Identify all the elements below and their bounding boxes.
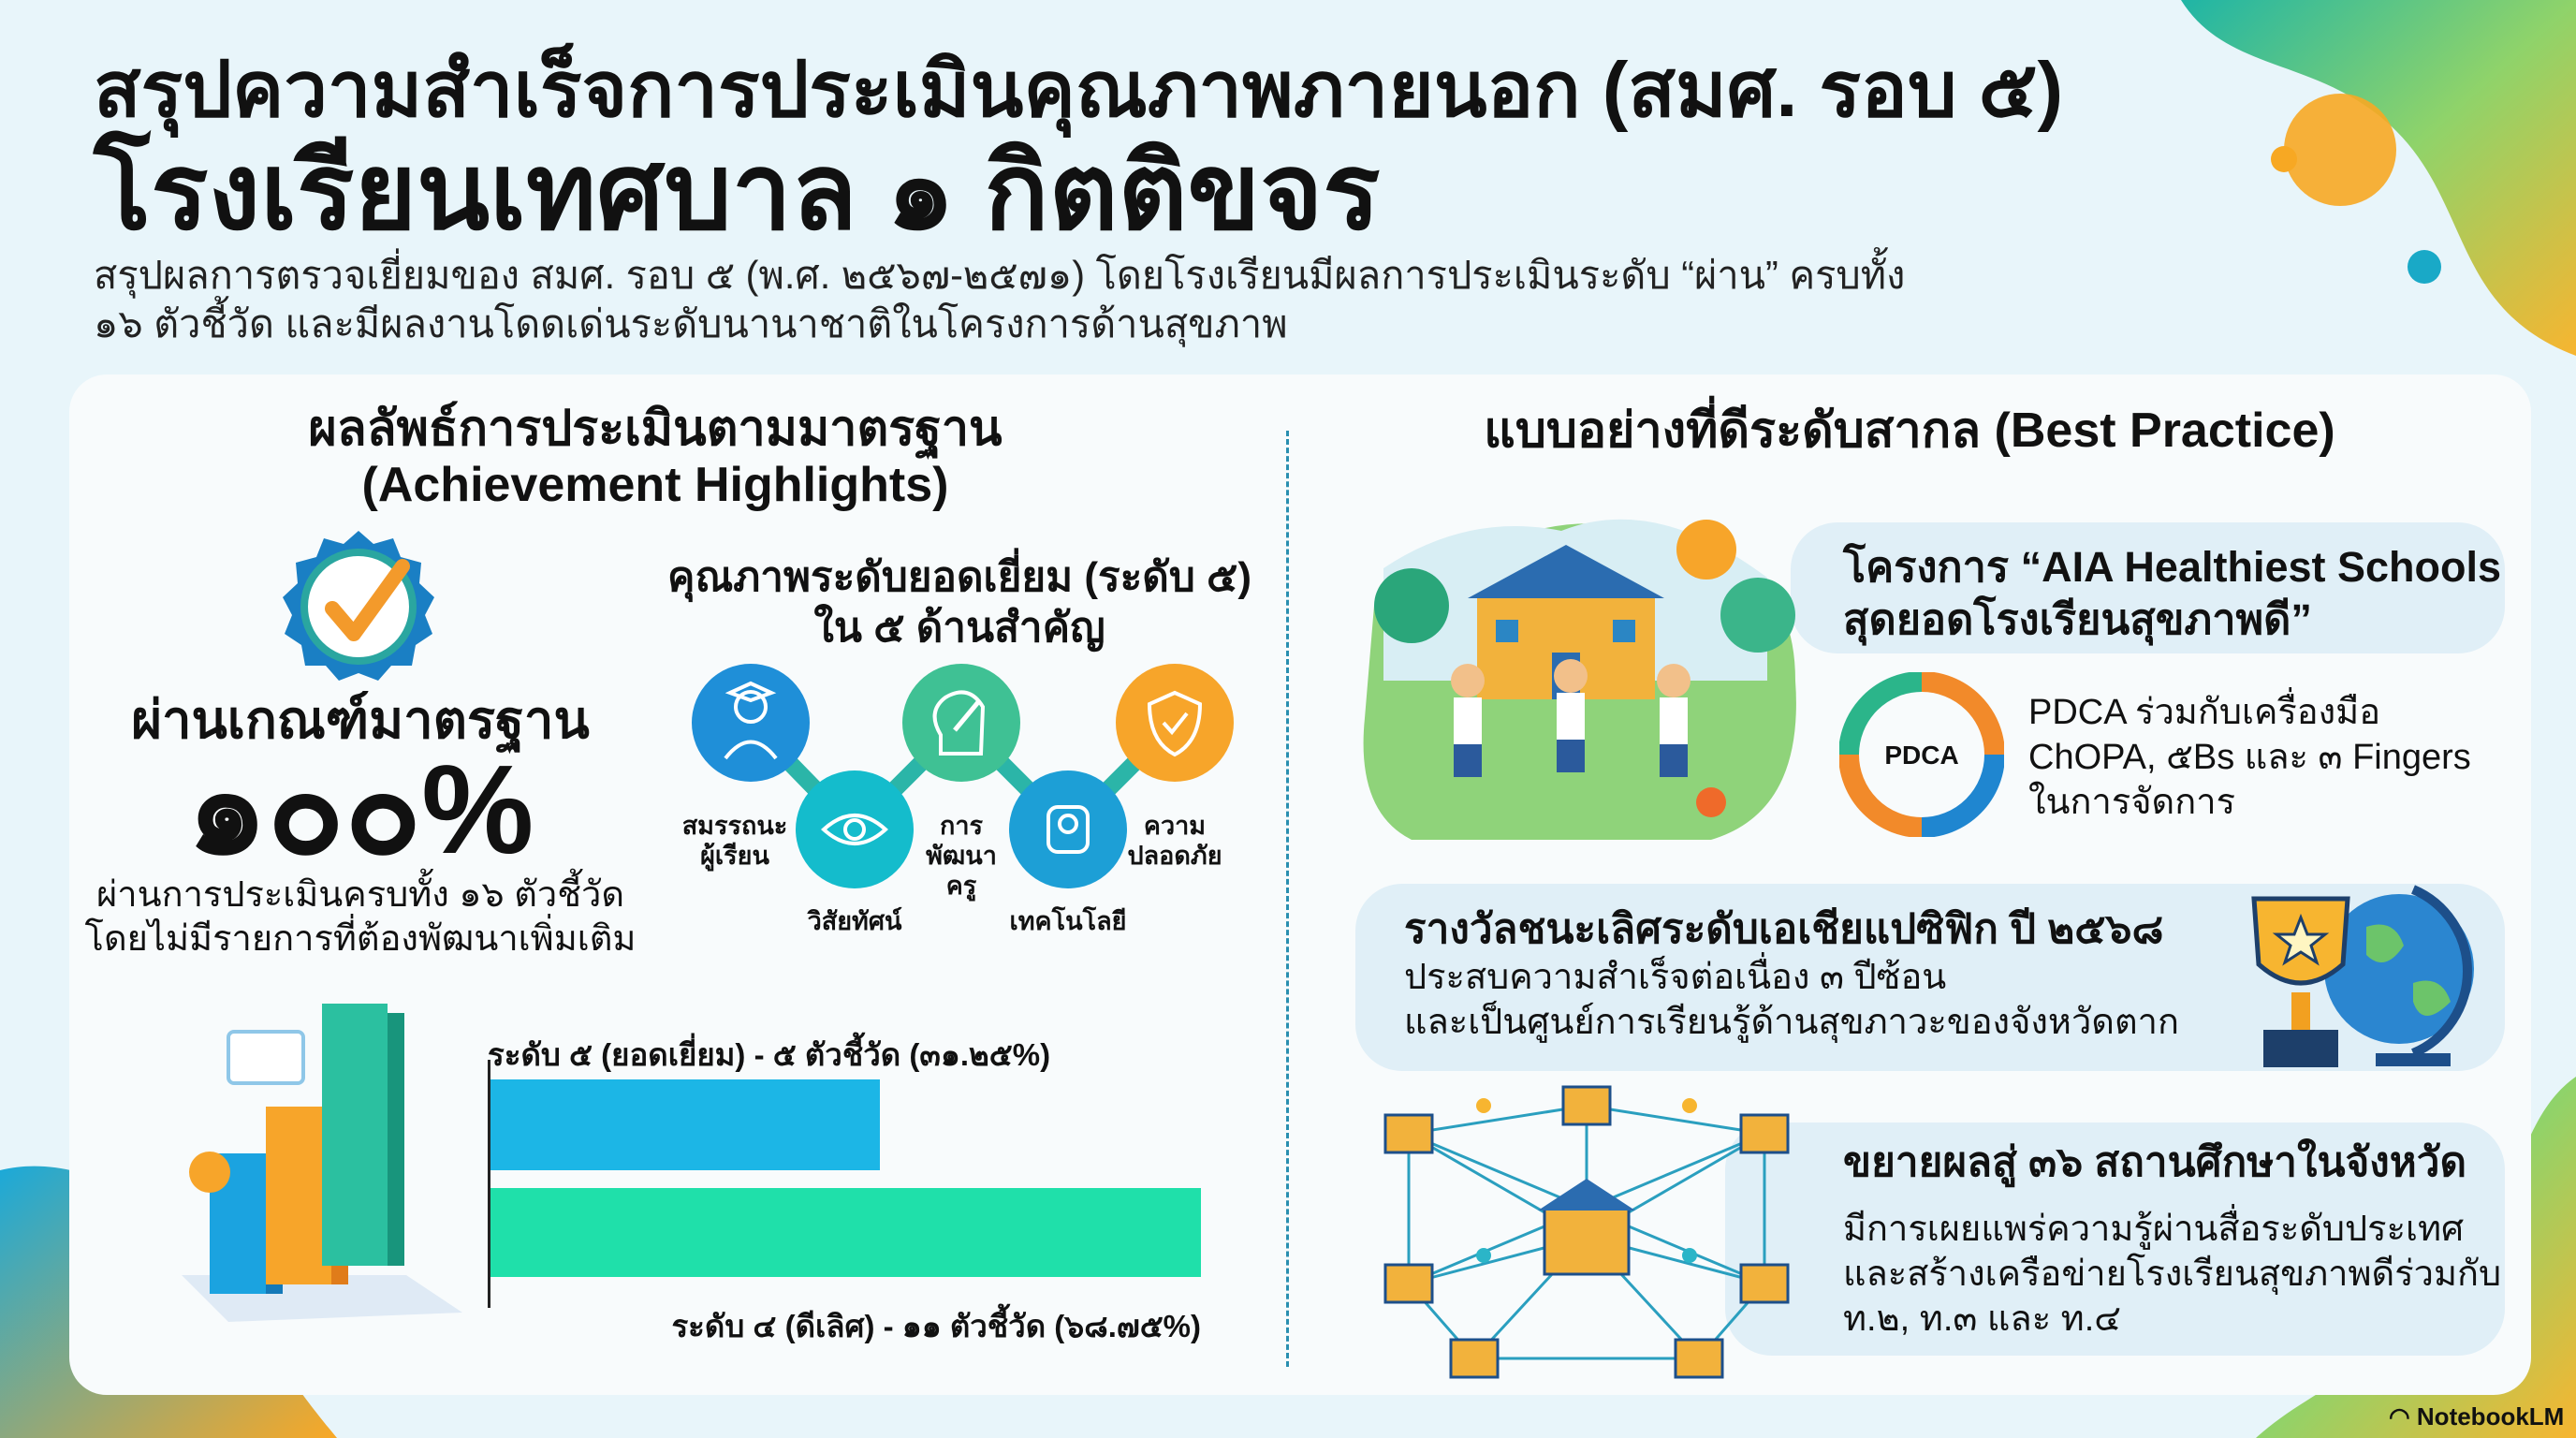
text: การ [940, 812, 983, 840]
illustration: school kids [1363, 519, 1796, 840]
area labels: สมรรถนะ [682, 812, 787, 840]
bar level 5 [490, 1079, 880, 1170]
left heading: ผลลัพธ์การประเมินตามมาตรฐาน [308, 402, 1003, 456]
expansion text: ท.๒, ท.๓ และ ท.๔ [1843, 1299, 2121, 1339]
NotebookLM logo: ◠ NotebookLM [2389, 1402, 2564, 1431]
PDCA text [2028, 687, 2471, 822]
text: ปลอดภัย [1127, 842, 1222, 870]
subtitle [94, 247, 1905, 347]
award text: และเป็นศูนย์การเรียนรู้ด้านสุขภาวะของจังหวัดตาก [1404, 1003, 2179, 1042]
pass description: ผ่านการประเมินครบทั้ง ๑๖ ตัวชี้วัด [96, 875, 624, 915]
text: วิสัยทัศน์ [808, 907, 901, 935]
icon: PDCA cycle [1839, 672, 2004, 837]
text: ความ [1144, 812, 1206, 840]
project title: สุดยอดโรงเรียนสุขภาพดี” [1843, 595, 2312, 643]
five areas diagram [692, 664, 1234, 888]
icon: PDCA cycle: PDCA [1884, 741, 1959, 770]
icon: trophy and globe [2251, 885, 2474, 1067]
pill 3 [1725, 1123, 2505, 1356]
subtitle: ๑๖ ตัวชี้วัด และมีผลงานโดดเด่นระดับนานาชาติในโครงการด้านสุขภาพ [94, 301, 1288, 345]
PDCA text: ในการจัดการ [2028, 783, 2235, 822]
left heading [308, 401, 1003, 512]
pass description: โดยไม่มีรายการที่ต้องพัฒนาเพิ่มเติม [85, 919, 636, 959]
bar level 4 [490, 1188, 1201, 1277]
award text: ประสบความสำเร็จต่อเนื่อง ๓ ปีซ้อน [1404, 958, 1946, 997]
main panel [69, 374, 2531, 1395]
PDCA text: ChOPA, ๕Bs และ ๓ Fingers [2028, 738, 2471, 777]
icon: badge check [283, 531, 434, 681]
subtitle: สรุปผลการตรวจเยี่ยมของ สมศ. รอบ ๕ (พ.ศ. ๒๕๖๗-๒๕๗๑) โดยโรงเรียนมีผลการประเมินระดับ “ผ่าน” ครบทั้ง [94, 253, 1905, 297]
divider [1286, 431, 1289, 1367]
bar chart [488, 1032, 1201, 1343]
expansion text: มีการเผยแพร่ความรู้ผ่านสื่อระดับประเทศ [1843, 1210, 2464, 1249]
text: พัฒนา [926, 842, 997, 870]
excellent title: คุณภาพระดับยอดเยี่ยม (ระดับ ๕) [667, 554, 1251, 600]
excellent title [667, 548, 1251, 652]
bar label level 5: ระดับ ๕ (ยอดเยี่ยม) - ๕ ตัวชี้วัด (๓๑.๒๕%) [488, 1037, 1050, 1072]
excellent title: ใน ๕ ด้านสำคัญ [813, 605, 1105, 651]
pass label: ผ่านเกณฑ์มาตรฐาน [131, 690, 590, 749]
title: สรุปความสำเร็จการประเมินคุณภาพภายนอก (สมศ. รอบ ๕) [94, 46, 2063, 133]
expansion text [1843, 1204, 2501, 1339]
right heading: แบบอย่างที่ดีระดับสากล (Best Practice) [1484, 404, 2335, 458]
school name: โรงเรียนเทศบาล ๑ กิตติขจร [94, 133, 1381, 252]
text: เทคโนโลยี [1010, 907, 1126, 935]
project title: โครงการ “AIA Healthiest Schools [1843, 543, 2501, 591]
circle: vision [796, 770, 914, 888]
expansion text: และสร้างเครือข่ายโรงเรียนสุขภาพดีร่วมกับ [1843, 1255, 2501, 1294]
network diagram [1383, 1086, 1790, 1378]
bar label level 4: ระดับ ๔ (ดีเลิศ) - ๑๑ ตัวชี้วัด (๖๘.๗๕%) [671, 1309, 1201, 1343]
award text [1404, 952, 2179, 1043]
pass description [84, 869, 636, 959]
circle: safety [1116, 664, 1234, 782]
pill 2: award [1355, 884, 2505, 1071]
area labels [682, 812, 787, 871]
circle: learners [692, 664, 810, 782]
circle: teacher development [902, 664, 1020, 782]
left heading: (Achievement Highlights) [362, 458, 948, 512]
100%: ๑๐๐% [187, 739, 534, 880]
area labels: ผู้เรียน [700, 842, 769, 870]
expansion title: ขยายผลสู่ ๓๖ สถานศึกษาในจังหวัด [1843, 1139, 2466, 1185]
circle: technology [1009, 770, 1127, 888]
icon: 3d bar chart [182, 1004, 462, 1322]
pill 1 [1791, 522, 2505, 653]
PDCA text: PDCA ร่วมกับเครื่องมือ [2028, 693, 2380, 732]
project title [1842, 543, 2501, 646]
award title: รางวัลชนะเลิศระดับเอเชียแปซิฟิก ปี ๒๕๖๘ [1404, 906, 2163, 952]
text: ครู [946, 872, 976, 900]
